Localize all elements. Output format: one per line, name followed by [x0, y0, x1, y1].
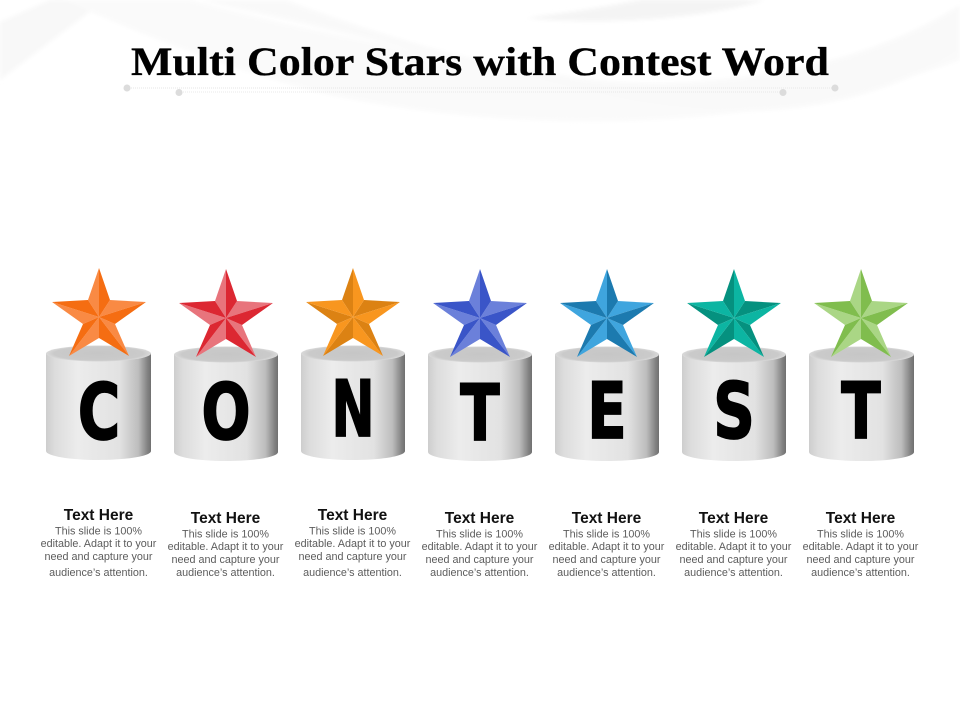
- caption: audience’s attention.: [430, 567, 529, 579]
- caption: need and capture your: [552, 554, 661, 566]
- cylinder: [46, 346, 151, 460]
- caption: editable. Adapt it to your: [422, 541, 538, 553]
- caption: This slide is 100%: [690, 528, 777, 540]
- caption: need and capture your: [44, 551, 153, 563]
- caption: Text Here: [572, 510, 642, 527]
- caption: audience’s attention.: [49, 567, 148, 579]
- caption: audience’s attention.: [557, 567, 656, 579]
- background swooshes: [0, 0, 960, 121]
- caption: editable. Adapt it to your: [168, 541, 284, 553]
- caption: need and capture your: [806, 554, 915, 566]
- column: O: [168, 269, 284, 579]
- caption: audience’s attention.: [176, 567, 275, 579]
- caption: This slide is 100%: [436, 528, 523, 540]
- letter T: T: [841, 366, 881, 457]
- caption: Text Here: [445, 510, 515, 527]
- cylinder: [428, 346, 532, 461]
- icon: teal star: [687, 269, 781, 357]
- caption: [295, 507, 411, 579]
- letter T: T: [460, 368, 500, 459]
- caption: need and capture your: [171, 554, 280, 566]
- column: N: [295, 268, 411, 579]
- icon: amber star: [306, 268, 400, 356]
- column: S: [676, 269, 792, 579]
- title: Multi Color Stars with Contest Word: [131, 39, 829, 84]
- cylinder: [555, 346, 659, 461]
- caption: Text Here: [699, 510, 769, 527]
- caption: need and capture your: [679, 554, 788, 566]
- caption: This slide is 100%: [55, 526, 142, 538]
- letter N: N: [331, 364, 375, 455]
- caption: need and capture your: [425, 554, 534, 566]
- caption: audience’s attention.: [303, 567, 402, 579]
- caption: [549, 510, 665, 579]
- column: final T: [803, 269, 919, 579]
- icon: green star: [814, 269, 908, 357]
- icon: blue star: [560, 269, 654, 357]
- title underline with dots: [124, 84, 838, 96]
- cylinder: [174, 346, 278, 461]
- letter O: O: [201, 367, 251, 458]
- letter C: C: [78, 367, 120, 458]
- caption: Text Here: [191, 510, 261, 527]
- caption: Text Here: [318, 507, 388, 524]
- caption: need and capture your: [298, 551, 407, 563]
- cylinder: [682, 346, 786, 461]
- icon: orange star: [52, 268, 146, 356]
- caption: editable. Adapt it to your: [803, 541, 919, 553]
- caption: Text Here: [64, 507, 134, 524]
- column: T: [422, 269, 538, 579]
- caption: editable. Adapt it to your: [295, 538, 411, 550]
- letter S: S: [713, 366, 755, 457]
- caption: editable. Adapt it to your: [549, 541, 665, 553]
- caption: [168, 510, 284, 579]
- caption: [41, 507, 157, 579]
- letter E: E: [587, 366, 627, 457]
- caption: This slide is 100%: [817, 528, 904, 540]
- caption: audience’s attention.: [811, 567, 910, 579]
- caption: editable. Adapt it to your: [41, 538, 157, 550]
- icon: red star: [179, 269, 273, 357]
- caption: audience’s attention.: [684, 567, 783, 579]
- caption: [676, 510, 792, 579]
- caption: editable. Adapt it to your: [676, 541, 792, 553]
- caption: This slide is 100%: [182, 528, 269, 540]
- column: E: [549, 269, 665, 579]
- column: C: [41, 268, 157, 579]
- caption: This slide is 100%: [309, 526, 396, 538]
- caption: [422, 510, 538, 579]
- caption: Text Here: [826, 510, 896, 527]
- cylinder: [301, 346, 405, 460]
- cylinder: [809, 346, 914, 461]
- icon: indigo star: [433, 269, 527, 357]
- caption: This slide is 100%: [563, 528, 650, 540]
- caption: [803, 510, 919, 579]
